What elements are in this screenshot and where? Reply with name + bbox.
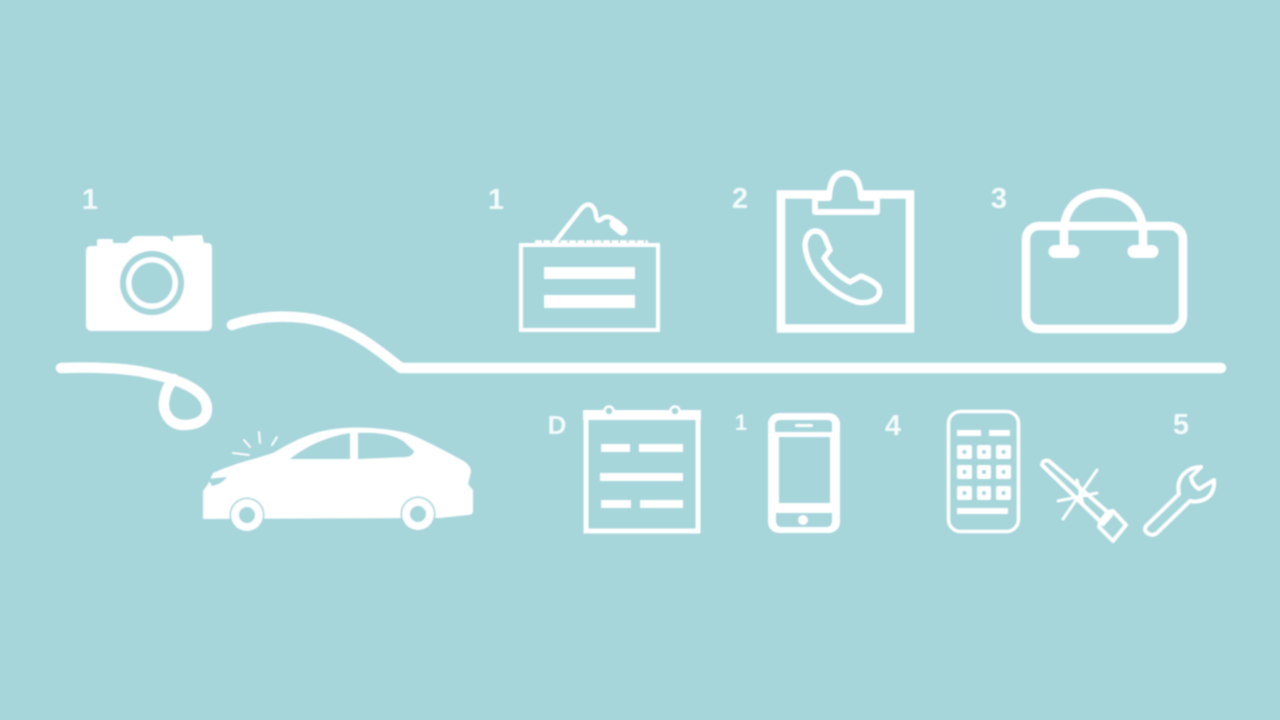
phone body: [768, 413, 840, 533]
calendar page: [586, 414, 698, 531]
icon: camera: [86, 235, 212, 331]
sign text bars: [544, 267, 635, 308]
bag handle: [1064, 193, 1143, 248]
phone bottom band: [776, 513, 832, 527]
icon: bag: [1026, 193, 1183, 329]
clipboard clip: [815, 173, 877, 212]
phone handset: [805, 231, 880, 303]
clipboard board: [781, 194, 910, 328]
road line with loop: [61, 317, 1221, 425]
icon: wrench: [1145, 467, 1214, 535]
label 5: wrench: 5: [1173, 409, 1189, 441]
screwdriver shaft: [1042, 460, 1111, 524]
sign board: [521, 245, 658, 330]
calendar header: [583, 410, 701, 420]
road: raised curve joining main line: [232, 317, 1221, 368]
label 1: camera: 1: [82, 184, 98, 216]
camera lens: [120, 251, 184, 315]
label 4: tablet: 4: [885, 410, 901, 442]
icon: damaged car: [203, 427, 473, 532]
screwdriver handle: [1099, 511, 1126, 541]
label 3: bag: 3: [991, 183, 1007, 215]
tablet bottom bar: [957, 508, 1008, 514]
phone screen: [779, 437, 830, 503]
label 1: sign: 1: [488, 184, 504, 216]
impact sparks: [233, 432, 277, 455]
road: left section ending in loop: [61, 368, 207, 425]
phone speaker: [795, 424, 813, 427]
icon: sign with mountain: [521, 205, 658, 330]
icon: clipboard with phone: [781, 173, 910, 328]
icon: smartphone: [768, 413, 840, 533]
icon: screwdriver with sparks: [1042, 460, 1126, 541]
calendar lines: [600, 444, 683, 508]
tablet app grid: [957, 445, 1011, 500]
bag handle feet: [1048, 245, 1158, 258]
rear wheel: [400, 496, 436, 532]
label D: calendar: D: [548, 410, 566, 440]
icon: calendar: [583, 406, 701, 531]
icon: tablet with app grid: [948, 412, 1018, 532]
tablet header bars: [957, 430, 1010, 436]
phone top band: [775, 420, 832, 432]
phone home button: [798, 515, 808, 525]
calendar rings: [604, 406, 680, 416]
tablet frame: [948, 412, 1018, 532]
front wheel: [230, 498, 264, 532]
label 2: clipboard: 2: [732, 183, 748, 215]
mountain line: [555, 205, 618, 242]
car windows: [290, 433, 414, 459]
tablet app glyphs: [962, 450, 1006, 495]
car headlight: [208, 477, 227, 486]
label 1: phone: 1: [735, 410, 747, 435]
sign top edge: [535, 240, 648, 244]
bag body: [1026, 226, 1183, 329]
mountain end blob: [615, 224, 622, 230]
sparks: [1058, 470, 1097, 519]
